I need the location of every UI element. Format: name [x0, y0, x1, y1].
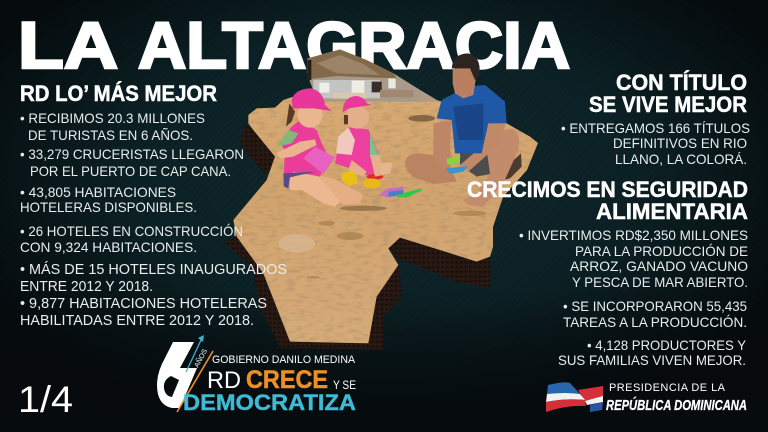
icon: flag	[546, 382, 603, 412]
heading	[589, 70, 747, 117]
bullet list: POR EL PUERTO DE CAP CANA.	[30, 163, 231, 179]
heading: RD LO’ MÁS MEJOR	[20, 81, 217, 106]
bullet list: • MÁS DE 15 HOTELES INAUGURADOS	[20, 261, 287, 278]
bullet list: HOTELERAS DISPONIBLES.	[20, 199, 197, 215]
heading: SE VIVE MEJOR	[589, 92, 747, 117]
bullet list: • 33,279 CRUCERISTAS LLEGARON	[20, 146, 244, 162]
background terrace	[310, 73, 443, 102]
icon: cyan arrow	[186, 335, 204, 372]
bullet text: • ENTREGAMOS 166 TÍTULOS	[561, 120, 750, 136]
bullet list: • 43,805 HABITACIONES	[20, 184, 176, 200]
bullet list: Y PESCA DE MAR ABIERTO.	[572, 274, 748, 290]
heading	[467, 177, 748, 224]
girl right	[335, 96, 393, 177]
text: RD: RD	[207, 367, 241, 394]
title: LA	[18, 8, 118, 82]
title: ALTAGRACIA	[138, 8, 570, 82]
panel: crecimos en seguridad alimentaria	[467, 177, 748, 368]
bullet list	[519, 227, 748, 368]
bullet list: • SE INCORPORARON 55,435	[563, 298, 747, 314]
icon: large six	[157, 342, 197, 408]
bullet list: ARROZ, GANADO VACUNO	[570, 258, 748, 274]
thatched hut	[307, 49, 397, 79]
bullet list	[20, 110, 287, 329]
heading: CRECIMOS EN SEGURIDAD	[467, 177, 748, 202]
bullet text: LLANO, LA COLORÁ.	[615, 151, 747, 167]
torn map edges	[225, 125, 491, 349]
text: crece: CRECE	[246, 366, 328, 394]
heading: ALIMENTARIA	[596, 199, 748, 224]
icon: orange slash	[177, 351, 213, 412]
panel: con título se vive mejor	[561, 70, 750, 167]
text: años: AÑOS	[192, 347, 209, 369]
bullet list: CON 9,324 HABITACIONES.	[20, 239, 197, 255]
bullet list: HABILITADAS ENTRE 2012 Y 2018.	[20, 312, 254, 329]
text: democratiza: DEMOCRATIZA	[183, 390, 356, 415]
beach photo	[220, 40, 540, 350]
man	[405, 53, 522, 207]
bullet list: • 26 HOTELES EN CONSTRUCCIÓN	[20, 223, 243, 239]
text: gobierno: GOBIERNO DANILO MEDINA	[212, 354, 356, 366]
logo: 6 años RD crece y se democratiza	[157, 335, 356, 415]
bullet list: • 4,128 PRODUCTORES Y	[587, 337, 747, 353]
bullet text	[561, 120, 750, 167]
bullet list: • INVERTIMOS RD$2,350 MILLONES	[519, 227, 748, 243]
panel: RD lo' más mejor	[20, 81, 287, 329]
page number: 1/4	[18, 379, 73, 420]
girl left	[276, 88, 363, 207]
sand marks	[278, 115, 487, 279]
bullet list: ENTRE 2012 Y 2018.	[20, 278, 153, 295]
bullet list: DE TURISTAS EN 6 AÑOS.	[28, 127, 193, 143]
text: y se: Y SE	[333, 378, 356, 392]
heading: CON TÍTULO	[616, 70, 747, 95]
bullet list: • RECIBIMOS 20.3 MILLONES	[20, 110, 205, 126]
map of La Altagracia with beach photo	[220, 40, 540, 350]
text: presidencia: PRESIDENCIA DE LA	[609, 382, 726, 394]
bullet list: TAREAS A LA PRODUCCIÓN.	[563, 314, 747, 330]
bullet list: • 9,877 HABITACIONES HOTELERAS	[20, 295, 267, 312]
toys	[342, 169, 422, 197]
bullet list: SUS FAMILIAS VIVEN MEJOR.	[558, 352, 746, 368]
logo: Presidencia de la República Dominicana	[546, 382, 747, 414]
bullet text: DEFINITIVOS EN RIO	[613, 135, 747, 151]
bullet list: PARA LA PRODUCCIÓN DE	[575, 243, 748, 259]
